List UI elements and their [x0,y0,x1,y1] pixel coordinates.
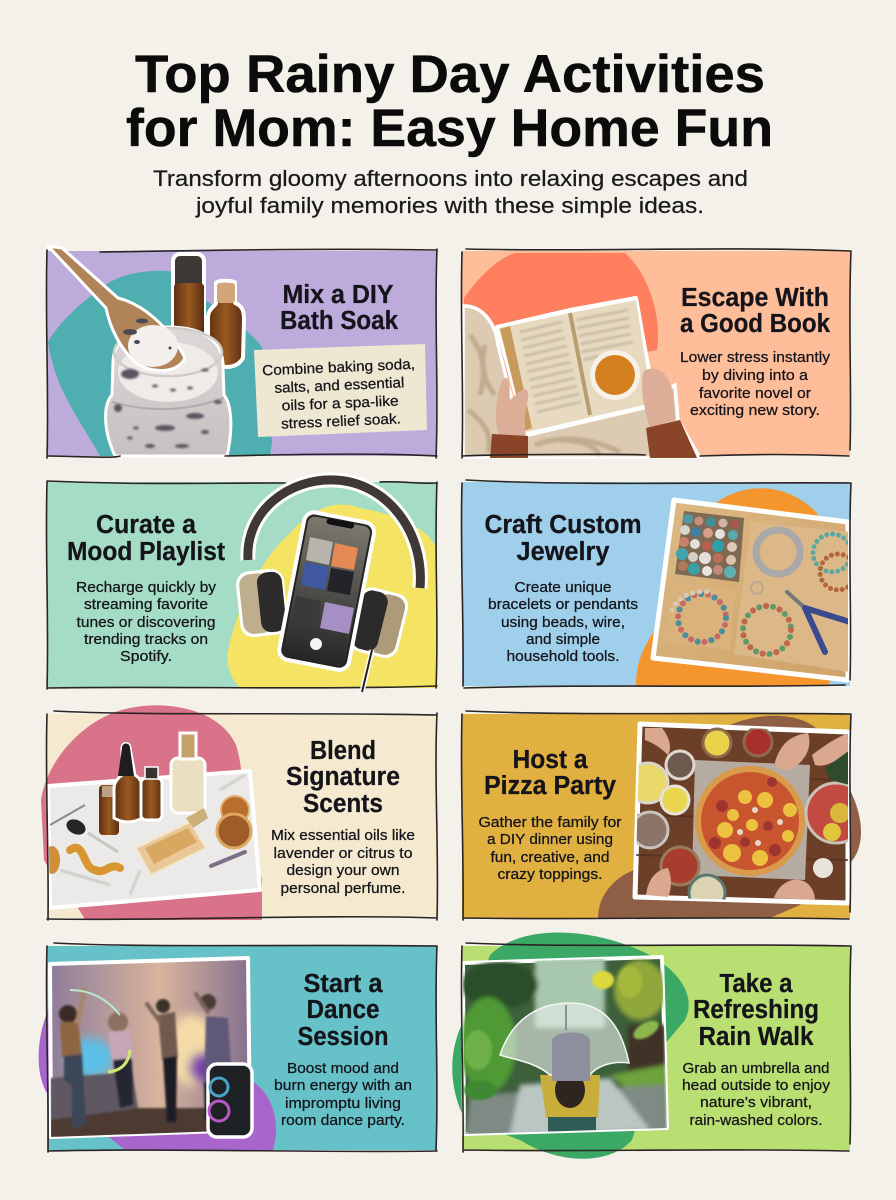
photo: marble tabletop with perfumes [44,733,260,908]
card description [76,580,217,665]
sleeves [490,420,697,458]
card heading [484,746,617,800]
dancer two [108,1012,134,1108]
photo: dancers in living room [50,958,250,1138]
hand-drawn frame [461,249,851,458]
blob: coral [464,253,658,380]
album tiles [291,537,358,634]
blob: brown [598,716,861,918]
card heading [280,281,399,335]
card description: nature's vibrant, [700,1095,812,1111]
card description: a DIY dinner using [487,832,613,848]
card description: Gather the family for [478,815,622,831]
dropper [66,819,86,835]
subtitle: joyful family memories with these simple ideas. [195,193,704,218]
photo: woman with umbrella in rain [460,957,668,1138]
card description: exciting new story. [690,403,820,419]
hand-drawn frame [46,943,437,1152]
title: for Mom: Easy Home Fun [126,99,773,158]
tray compartments [663,511,850,672]
icon: wooden spoon [48,246,185,371]
panel: Blend Signature Scents [41,705,437,920]
card heading: Jewelry [516,538,610,566]
person [540,1075,600,1132]
card description [262,357,418,433]
left hand [496,378,528,438]
phone [278,511,376,672]
card description [478,815,622,883]
dried orange slices [217,796,251,848]
panel: Curate a Mood Playlist [46,480,437,692]
card heading: Mood Playlist [67,538,225,566]
dancer four [196,994,232,1120]
card description: trending tracks on [84,632,208,648]
hand-drawn frame [461,480,851,688]
card description [680,350,831,419]
card description: head outside to enjoy [682,1078,831,1094]
card description: by diving into a [702,368,809,384]
dancer three [147,999,178,1122]
photo: pizza table [632,722,850,906]
card heading: Pizza Party [484,772,617,800]
hand-drawn frame [461,711,851,920]
hand-drawn frame [46,711,437,920]
card heading [286,737,400,818]
blob: orange [636,488,848,686]
card description: Combine baking soda, [262,357,415,379]
blob: purple [39,1000,276,1150]
subtitle [153,166,748,218]
card heading [484,511,642,566]
card description: stress relief soak. [281,411,401,433]
card heading: Session [298,1023,388,1051]
card heading: Refreshing [693,996,819,1024]
right hand [642,369,675,428]
icon: essential oil bottle short [208,281,244,367]
pizza [695,766,805,876]
card description: streaming favorite [84,597,208,613]
hand-drawn frame [46,249,437,458]
card description: tunes or discovering [76,615,216,631]
dancer one [59,990,86,1128]
card description: using beads, wire, [501,615,625,631]
card heading: Escape With [681,284,829,312]
beads [676,514,740,578]
card description: design your own [286,863,400,879]
card description: bracelets or pendants [488,597,638,613]
card heading: Signature [286,763,400,791]
icon: jar of bath salts [106,327,231,456]
card description: Recharge quickly by [76,580,217,596]
card heading [680,284,831,338]
card heading [693,970,819,1051]
panel: Start a Dance Session [39,943,437,1152]
left ear cup [235,568,289,638]
hand-drawn frame [46,481,437,689]
panel: Escape With a Good Book [461,249,851,458]
card heading: Mix a DIY [282,281,394,309]
topping bowls [636,728,848,900]
card description: Mix essential oils like [271,828,415,844]
icon: essential oil bottle tall [173,254,204,343]
headphone cable [362,650,372,692]
card heading [298,970,388,1051]
card description: favorite novel or [699,386,811,402]
hand-drawn frame [461,943,851,1152]
blob: rose [41,705,262,920]
card heading: Craft Custom [484,511,642,539]
icon: tea cup [590,350,640,400]
icon: pliers [787,592,850,652]
card heading: Start a [304,970,383,998]
card heading: Bath Soak [280,307,399,335]
card description: Spotify. [120,649,172,665]
card description: crazy toppings. [498,867,602,883]
umbrella [500,1003,629,1081]
icon: amber bottle medium [141,767,162,820]
card description: household tools. [506,649,620,665]
card heading: Take a [720,970,793,998]
card description: Create unique [514,580,612,596]
card heading: Blend [310,737,376,765]
card description [271,828,415,897]
blob: teal [48,271,272,456]
subtitle: Transform gloomy afternoons into relaxing escapes and [153,166,748,191]
card description: rain-washed colors. [690,1113,822,1129]
blob: yellow [227,504,436,688]
card description: Boost mood and [287,1061,399,1077]
card description: burn energy with an [274,1078,412,1094]
lavender sprig [211,852,245,866]
card description: Lower stress instantly [680,350,831,366]
card description: personal perfume. [280,881,406,897]
card description: impromptu living [285,1096,401,1112]
card description [488,580,638,665]
title [126,45,773,158]
icon: square perfume bottle [136,808,208,875]
icon: party speaker [208,1064,252,1137]
note: torn paper [254,344,427,437]
right ear cup [347,585,411,661]
photo: bead tray [653,500,856,680]
card description [274,1061,412,1129]
card description: and simple [526,632,600,648]
photo: book and knit blanket [463,298,700,458]
card description: fun, creative, and [490,850,610,866]
card description [682,1061,831,1129]
icon: tall perfume bottle [171,733,205,813]
panel: Mix a DIY Bath Soak [46,246,437,458]
blob: green [452,932,689,1159]
panel: Craft Custom Jewelry [461,480,856,688]
bracelets [672,530,856,654]
card heading: Host a [512,746,588,774]
panel: Take a Refreshing Rain Walk [452,932,851,1159]
icon: dropper bottle [114,744,142,822]
card description: room dance party. [281,1113,405,1129]
icon: amber bottle small [99,785,119,835]
card heading: a Good Book [680,310,831,338]
card description: Grab an umbrella and [682,1061,830,1077]
card description: oils for a spa-like [281,393,399,415]
hands [645,728,850,900]
card description: lavender or citrus to [274,846,412,862]
card description: salts, and essential [274,375,405,397]
title: Top Rainy Day Activities [135,45,765,104]
panel: Host a Pizza Party [461,711,866,920]
card heading: Rain Walk [698,1023,814,1051]
card heading [67,511,225,566]
icon: headphones and phone [235,480,420,692]
card heading: Scents [303,790,383,818]
card heading: Dance [306,996,380,1024]
card heading: Curate a [96,511,197,539]
orange peel [70,848,120,871]
